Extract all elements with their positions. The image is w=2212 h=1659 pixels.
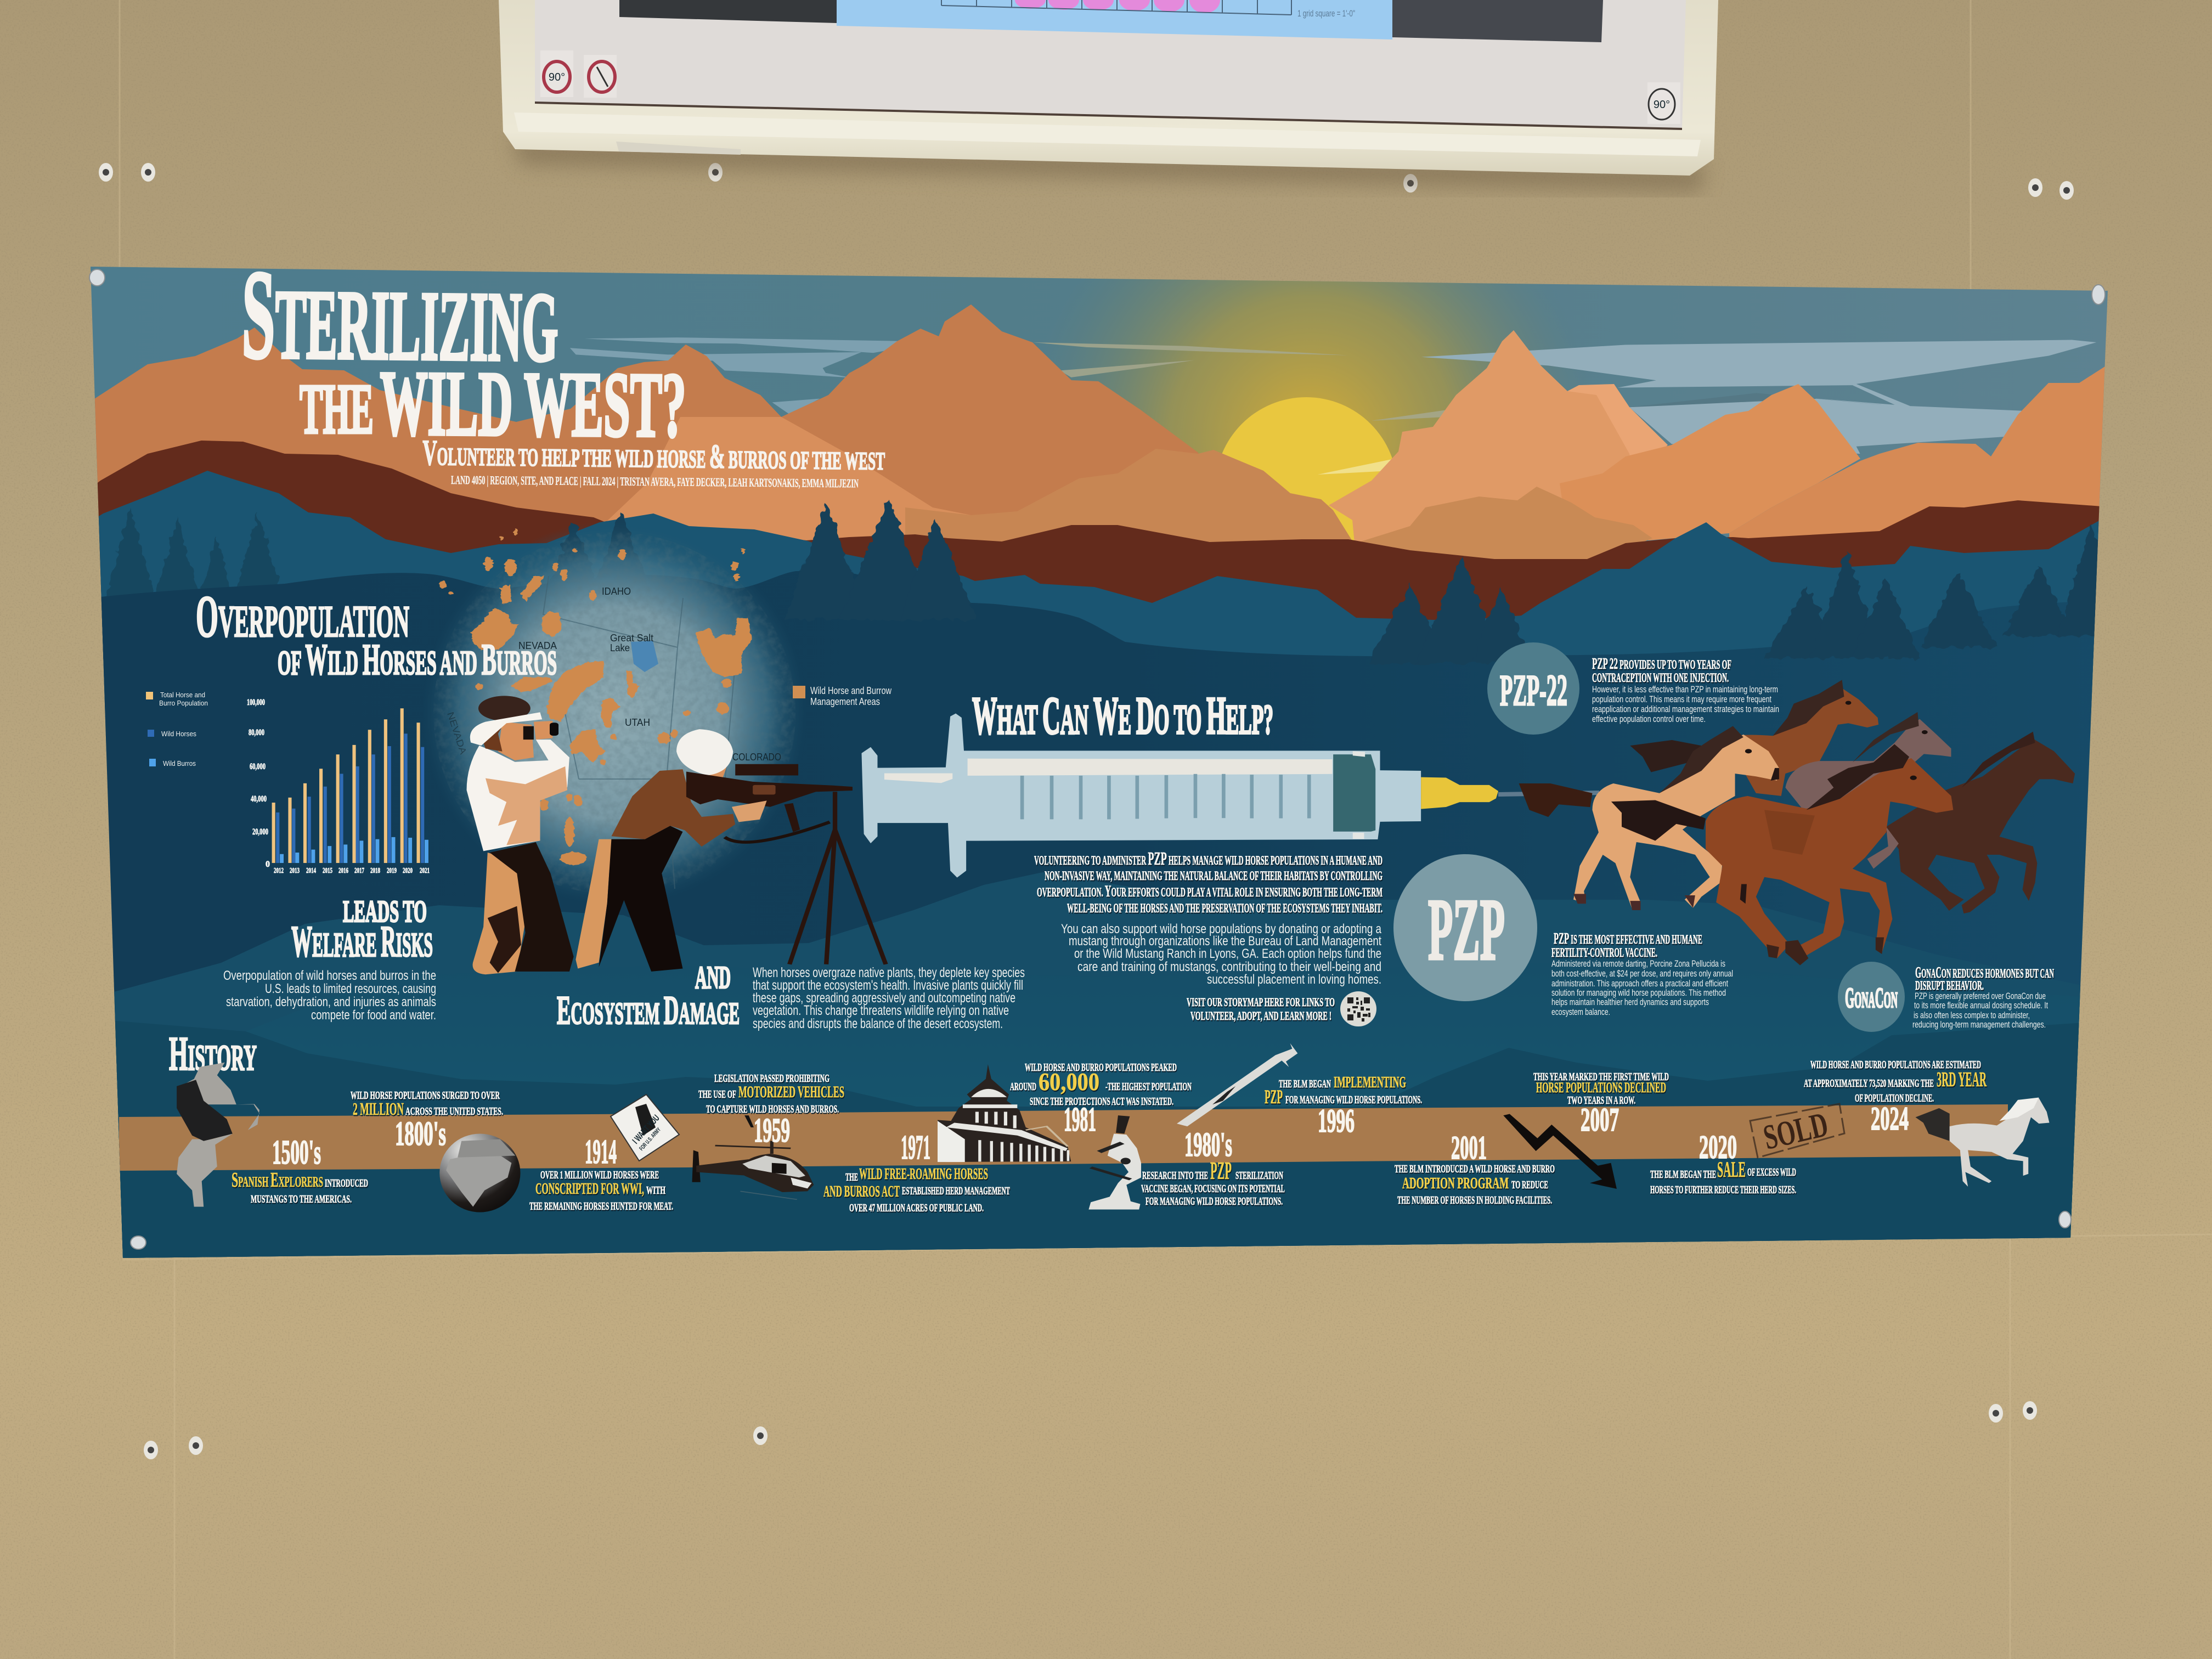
x axis years: 2015 xyxy=(323,867,332,875)
timeline: 1959: TO CAPTURE WILD HORSES AND BURROS. xyxy=(706,1103,839,1115)
map spotlight xyxy=(422,521,815,911)
poster: 3RD YEAR xyxy=(1937,1068,1987,1091)
timeline: 2001: THE NUMBER OF HORSES IN HOLDING FACILITIES. xyxy=(1397,1194,1552,1206)
x axis years: 2012 xyxy=(274,867,284,875)
icon: I want you poster: FOR U.S. ARMY xyxy=(638,1126,662,1152)
PZP text: Administered via remote darting, Porcine Zona Pellucida is xyxy=(1551,958,1725,969)
chart legend: Total Horse and xyxy=(160,691,205,699)
figure: man with binoculars xyxy=(467,696,574,974)
timeline: 1996 xyxy=(1265,1074,1422,1139)
timeline: 1996: PZP xyxy=(1265,1086,1283,1108)
volunteering text: NON-INVASIVE WAY, MAINTAINING THE NATURAL BALANCE OF THEIR HABITATS BY CONTROLLING xyxy=(1045,869,1383,883)
storymap call to action: VOLUNTEER, ADOPT, AND LEARN MORE ! xyxy=(1190,1009,1331,1023)
icon: declining arrow xyxy=(1503,1114,1617,1189)
horse: light tan xyxy=(1519,726,1779,910)
callout: PZP circle: PZP xyxy=(1428,881,1505,978)
timeline: 1981: 60,000 xyxy=(1039,1068,1099,1096)
y axis labels: 0 xyxy=(266,860,270,869)
timeline: 1971: ESTABLISHED HERD MANAGEMENT xyxy=(902,1185,1010,1197)
timeline: 1800s: 2 MILLION xyxy=(353,1099,404,1119)
map labels: Great Salt xyxy=(610,633,653,644)
timeline: 1500s: MUSTANGS TO THE AMERICAS. xyxy=(251,1193,352,1205)
timeline: 2020: SALE xyxy=(1717,1157,1746,1182)
sun glow xyxy=(1004,219,1618,592)
timeline: 1914: OVER 1 MILLION WILD HORSES WERE xyxy=(540,1169,659,1181)
center mountain back xyxy=(1481,330,1668,483)
dark pine trees xyxy=(535,498,2118,664)
map legend: Wild Horse and Burrow xyxy=(810,685,892,696)
ecosystem damage text xyxy=(753,965,1025,1031)
timeline: 1959: THE USE OF xyxy=(698,1088,736,1101)
timeline: 1959 xyxy=(698,1073,844,1115)
PZP-22 text: reapplication or additional management strategies to maintain xyxy=(1592,704,1779,714)
PZP text: PZP IS THE MOST EFFECTIVE AND HUMANE xyxy=(1554,930,1702,947)
timeline: 1971 xyxy=(823,1129,1010,1214)
blue ridge xyxy=(91,471,2118,713)
PZP text xyxy=(1551,930,1733,1017)
timeline: 2020: 2020 xyxy=(1699,1129,1737,1165)
timeline: 2001: 2001 xyxy=(1451,1130,1487,1166)
x axis years: 2014 xyxy=(306,867,316,875)
scattered management areas xyxy=(439,528,745,602)
timeline: 1996: 1996 xyxy=(1318,1103,1355,1139)
icon: capitol building xyxy=(938,1064,1071,1162)
chart legend: Burro Population xyxy=(159,699,208,707)
icon: sold stamp: SOLD xyxy=(1760,1104,1832,1157)
x axis years: 2017 xyxy=(354,867,364,875)
heading: what can we do to help: WHAT CAN WE DO TO HELP? xyxy=(972,686,1273,746)
dark foreground xyxy=(91,571,2118,1262)
timeline: 2007 xyxy=(1533,1071,1669,1138)
timeline: 2001: TO REDUCE xyxy=(1511,1179,1548,1191)
timeline: 1981: WILD HORSE AND BURRO POPULATIONS PEAKED xyxy=(1025,1062,1177,1074)
bars xyxy=(272,708,428,863)
icon: rearing horse with rider xyxy=(177,1063,259,1207)
needle xyxy=(1498,793,1599,794)
timeline: 1981: 1981 xyxy=(1064,1101,1096,1138)
y axis labels: 40,000 xyxy=(251,794,267,804)
timeline: 2001 xyxy=(1395,1130,1555,1206)
timeline: 2024: OF POPULATION DECLINE. xyxy=(1855,1092,1934,1104)
timeline: 1980s: VACCINE BEGAN, FOCUSING ON ITS POTENTIAL xyxy=(1141,1183,1285,1195)
year 1959: 1959 xyxy=(754,1112,790,1149)
y axis labels: 100,000 xyxy=(247,698,265,707)
heading: leads to welfare risks: WELFARE RISKS xyxy=(291,918,433,966)
icon: microscope xyxy=(1088,1115,1141,1210)
map labels: COLORADO xyxy=(732,752,781,763)
horse: front brown xyxy=(1706,744,1953,965)
center mountain xyxy=(1329,330,1646,549)
ecosystem damage text: species and disrupts the balance of the desert ecosystem. xyxy=(753,1016,1003,1031)
heading: overpopulation: OVERPOPULATION xyxy=(196,584,409,650)
history heading: HISTORY xyxy=(169,1028,257,1081)
PZP text: ecosystem balance. xyxy=(1551,1007,1610,1017)
callout: PZP circle xyxy=(1393,854,1537,1001)
icon: helicopter xyxy=(692,1115,814,1199)
below band fill xyxy=(110,1147,2118,1262)
PZP text: both cost-effective, at $24 per dose, and requires only annual xyxy=(1551,968,1733,979)
clouds left xyxy=(570,337,903,415)
timeline: 1500s: INTRODUCED xyxy=(325,1177,368,1189)
title: THE xyxy=(300,370,374,449)
sun xyxy=(1215,397,1397,579)
subtitle: VOLUNTEER TO HELP THE WILD HORSE & BURROS OF THE WEST xyxy=(422,433,885,478)
PZP-22 text: effective population control over time. xyxy=(1592,714,1706,724)
ecosystem damage text: these gaps, spreading aggressively and outcompeting native xyxy=(753,990,1015,1006)
welfare risks text: starvation, dehydration, and injuries as animals xyxy=(226,995,436,1009)
map labels: IDAHO xyxy=(602,586,631,597)
GonaCon text xyxy=(1912,964,2054,1030)
icon: QR code xyxy=(1340,991,1376,1026)
screen: dark right panel xyxy=(1392,0,1603,42)
callout: PZP-22 circle: PZP-22 xyxy=(1500,667,1567,715)
x axis years: 2016 xyxy=(338,867,348,875)
ecosystem damage text: vegetation. This change threatens wildlife relying on native xyxy=(753,1003,1009,1018)
lake xyxy=(631,641,658,672)
volunteering text: VOLUNTEERING TO ADMINISTER PZP HELPS MANAGE WILD HORSE POPULATIONS IN A HUMANE AND xyxy=(1034,849,1383,869)
heading: leads to welfare risks xyxy=(291,895,433,966)
welfare risks text: U.S. leads to limited resources, causing xyxy=(265,981,436,996)
timeline: 2024: 2024 xyxy=(1871,1101,1909,1137)
storymap call to action: VISIT OUR STORYMAP HERE FOR LINKS TO xyxy=(1187,995,1335,1009)
timeline: 1996: FOR MANAGING WILD HORSE POPULATIONS. xyxy=(1285,1094,1422,1106)
GonaCon text: reducing long-term management challenges. xyxy=(1912,1019,2046,1030)
timeline: 1980s xyxy=(1141,1126,1285,1207)
timeline: 1971: OVER 47 MILLION ACRES OF PUBLIC LAND. xyxy=(849,1202,984,1214)
wall screws xyxy=(99,163,2074,1459)
ecosystem damage text: When horses overgraze native plants, they deplete key species xyxy=(753,965,1025,980)
timeline: 2020 xyxy=(1650,1129,1796,1196)
timeline: 1914: THE REMAINING HORSES HUNTED FOR MEAT. xyxy=(529,1200,673,1212)
map labels: NEVADA xyxy=(445,710,469,756)
center lower mountain xyxy=(1356,487,1652,565)
y axis labels xyxy=(247,698,270,869)
x axis years: 2019 xyxy=(387,867,397,875)
timeline: 1800s: WILD HORSE POPULATIONS SURGED TO OVER xyxy=(351,1090,500,1102)
timeline: 1980s: RESEARCH INTO THE xyxy=(1142,1170,1208,1182)
far right mountains xyxy=(1729,357,2118,560)
screen: blue grid chart: 1 grid square = 1'-0" xyxy=(1297,8,1355,19)
timeline: 1981: -THE HIGHEST POPULATION xyxy=(1105,1081,1192,1093)
heading: and ecosystem damage: ECOSYSTEM DAMAGE xyxy=(557,988,740,1033)
timeline: 1971: WILD FREE-ROAMING HORSES xyxy=(859,1166,988,1183)
support text: or the Wild Mustang Ranch in Lyons, GA. Each option helps fund the xyxy=(1074,946,1381,961)
timeline: 1914: 1914 xyxy=(585,1133,617,1171)
volunteering text: OVERPOPULATION. YOUR EFFORTS COULD PLAY A VITAL ROLE IN ENSURING BOTH THE LONG-TERM xyxy=(1037,882,1383,900)
icon: I want you poster xyxy=(611,1094,679,1161)
credits line: LAND 4050 | REGION, SITE, AND PLACE | FALL 2024 | TRISTAN AVERA, FAYE DECKER, LEAH KARTSONAKIS, EMMA MILJEZIN xyxy=(451,473,859,490)
title line 1: STERILIZING xyxy=(241,244,559,388)
PZP-22 text: However, it is less effective than PZP in maintaining long-term xyxy=(1592,684,1778,695)
GonaCon text: PZP is generally preferred over GonaCon due xyxy=(1915,991,2046,1001)
timeline: 1996: IMPLEMENTING xyxy=(1334,1074,1406,1091)
poster xyxy=(82,219,2123,1262)
welfare risks text xyxy=(223,968,436,1023)
x axis years: 2018 xyxy=(370,867,380,875)
timeline: 1981: SINCE THE PROTECTIONS ACT WAS INSTATED. xyxy=(1030,1096,1173,1108)
timeline: 1981 xyxy=(1010,1062,1192,1138)
figure: woman with rifle xyxy=(575,729,886,972)
timeline: 1500s xyxy=(232,1134,368,1205)
icon: no tilt sticker xyxy=(584,55,617,98)
timeline: 1980s: 1980's xyxy=(1184,1126,1232,1164)
map legend: Management Areas xyxy=(810,696,880,707)
timeline: 1800s: 1800's xyxy=(395,1115,446,1153)
icon: rotate 90 sticker: 90° xyxy=(1654,99,1670,111)
PZP-22 text: CONTRACEPTION WITH ONE INJECTION. xyxy=(1592,671,1729,685)
right center mountain xyxy=(1560,384,1860,540)
welfare risks text: Overpopulation of wild horses and burros in the xyxy=(223,968,436,983)
timeline: 1980s: FOR MANAGING WILD HORSE POPULATIONS. xyxy=(1146,1195,1283,1207)
timeline: 1971: AND BURROS ACT xyxy=(823,1183,900,1200)
wild horse management areas (map blobs) xyxy=(439,576,752,865)
heading: overpopulation: OF WILD HORSES AND BURROS xyxy=(278,636,557,684)
map labels: UTAH xyxy=(625,717,650,728)
title line 2 large: WILD WEST? xyxy=(380,352,686,456)
icon: no rotate sticker xyxy=(540,50,573,97)
timeline: 1800s xyxy=(351,1090,503,1153)
timeline: 2007: 2007 xyxy=(1581,1102,1619,1138)
timeline: 2024 xyxy=(1804,1059,1987,1137)
timeline: 2007: HORSE POPULATIONS DECLINED xyxy=(1536,1080,1666,1096)
x axis years xyxy=(274,867,430,875)
map labels xyxy=(445,586,781,763)
timeline: 1500s: 1500's xyxy=(272,1134,321,1171)
timeline: 1980s: PZP xyxy=(1210,1156,1232,1184)
icon: syringe xyxy=(861,714,1498,878)
timeline: 1914: CONSCRIPTED FOR WWI, xyxy=(535,1181,644,1198)
map labels: Lake xyxy=(610,642,630,653)
icon: globe xyxy=(439,1133,521,1212)
horse: dark right xyxy=(1867,732,2075,913)
support text: You can also support wild horse populations by donating or adopting a xyxy=(1061,922,1382,936)
timeline: 2001: THE BLM INTRODUCED A WILD HORSE AND BURRO xyxy=(1395,1163,1555,1175)
screen: dark left panel xyxy=(619,0,837,23)
rifle on tripod xyxy=(686,764,886,964)
PZP-22 text xyxy=(1592,656,1779,724)
volunteering text xyxy=(1034,849,1383,915)
chart legend xyxy=(146,691,208,768)
map labels: NEVADA xyxy=(518,640,557,651)
x axis years: 2013 xyxy=(290,867,300,875)
icon: sold stamp xyxy=(1750,1104,1844,1158)
welfare risks text: compete for food and water. xyxy=(311,1008,436,1023)
PZP text: helps maintain healthier herd dynamics and supports xyxy=(1551,997,1709,1007)
GonaCon text: to its more flexible annual dosing schedule. It xyxy=(1914,1000,2048,1011)
timeline: 1914: WITH xyxy=(646,1184,665,1197)
support text: successful placement in loving homes. xyxy=(1207,972,1381,987)
trees left (blue ridge) xyxy=(91,505,302,658)
timeline: 1800s: ACROSS THE UNITED STATES. xyxy=(405,1105,503,1118)
timeline: 2007: THIS YEAR MARKED THE FIRST TIME WILD xyxy=(1533,1071,1669,1083)
timeline: 2020: HORSES TO FURTHER REDUCE THEIR HERD SIZES. xyxy=(1650,1184,1796,1196)
PZP text: administration. This approach offers a practical and efficient xyxy=(1551,978,1728,989)
timeline: 2024: AT APPROXIMATELY 73,520 MARKING THE xyxy=(1804,1077,1934,1090)
support text xyxy=(1061,922,1382,987)
icon: no rotate sticker: 90° xyxy=(549,71,565,83)
storymap call to action xyxy=(1187,995,1335,1023)
y axis labels: 80,000 xyxy=(249,728,264,737)
GonaCon text: is also often less complex to administer, xyxy=(1914,1010,2030,1020)
y axis labels: 20,000 xyxy=(252,827,268,837)
ecosystem damage text: that support the ecosystem's health. Invasive plants quickly fill xyxy=(753,978,1023,993)
bar chart: horse and burro population xyxy=(247,698,430,875)
timeline: 1971: 1971 xyxy=(901,1129,930,1166)
PZP text: solution for managing wild horse populations. This method xyxy=(1551,988,1726,998)
timeline: 1981: AROUND xyxy=(1010,1081,1036,1093)
timeline: 2007: TWO YEARS IN A ROW. xyxy=(1567,1094,1635,1107)
chart legend: Wild Horses xyxy=(161,730,196,738)
timeline: 2020: OF EXCESS WILD xyxy=(1747,1166,1796,1178)
timeline: 1971: THE xyxy=(845,1171,858,1183)
callout: GonaCon circle: GONACON xyxy=(1845,983,1898,1014)
icon: I want you poster: I WANT YOU xyxy=(630,1113,662,1146)
horse: brown back xyxy=(1630,680,1878,796)
lighter lower left slope xyxy=(606,417,971,549)
timeline: 2020: THE BLM BEGAN THE xyxy=(1650,1169,1716,1181)
timeline: 2024: WILD HORSE AND BURRO POPULATIONS ARE ESTIMATED xyxy=(1810,1059,1981,1071)
chart legend: Wild Burros xyxy=(163,759,196,768)
icon: small syringe xyxy=(1177,1043,1297,1126)
timeline: 1980s: STERILIZATION xyxy=(1235,1170,1283,1182)
timeline: 1959: MOTORIZED VEHICLES xyxy=(738,1083,844,1101)
GonaCon text: GONACON REDUCES HORMONES BUT CAN xyxy=(1915,964,2054,981)
callout: PZP-22 circle xyxy=(1487,642,1579,735)
PZP text: FERTILITY-CONTROL VACCINE. xyxy=(1551,946,1657,960)
heading: and ecosystem damage: AND xyxy=(695,960,731,995)
heading: and ecosystem damage xyxy=(557,960,740,1033)
display case frame at top of wall xyxy=(499,0,1718,192)
PZP-22 text: PZP 22 PROVIDES UP TO TWO YEARS OF xyxy=(1592,656,1731,673)
GonaCon text: DISRUPT BEHAVIOR. xyxy=(1915,979,1984,992)
x axis years: 2020 xyxy=(403,867,413,875)
timeline band xyxy=(119,1104,2008,1171)
rust ridge xyxy=(91,441,2118,658)
heading: overpopulation xyxy=(196,584,557,684)
screen: blue grid chart xyxy=(837,0,1392,40)
map legend xyxy=(793,685,892,707)
PZP-22 text: population control. This means it may require more frequent xyxy=(1592,694,1771,704)
support text: mustang through organizations like the Bureau of Land Management xyxy=(1069,934,1381,949)
x axis years: 2021 xyxy=(420,867,430,875)
far left mountains xyxy=(91,304,1234,565)
corner pins xyxy=(89,269,2105,1249)
sky xyxy=(82,258,2123,752)
timeline: 1914 xyxy=(529,1133,673,1212)
mid-left mountain xyxy=(905,449,1361,554)
horses illustration xyxy=(1519,680,2075,965)
horse: gray xyxy=(1785,712,1951,810)
title xyxy=(241,244,885,490)
lower hills xyxy=(110,872,2118,1262)
timeline: 2001: ADOPTION PROGRAM xyxy=(1402,1175,1509,1192)
clouds right xyxy=(1032,340,2096,475)
timeline: 1996: THE BLM BEGAN xyxy=(1279,1078,1331,1090)
heading: leads to welfare risks: LEADS TO xyxy=(343,895,427,929)
icon: white running horse xyxy=(1915,1098,2050,1187)
icon: rotate 90 sticker xyxy=(1647,82,1680,124)
timeline: 1959: LEGISLATION PASSED PROHIBITING xyxy=(714,1073,830,1085)
y axis labels: 60,000 xyxy=(250,762,266,771)
support text: care and training of mustangs, contributing to their well-being and xyxy=(1077,960,1381,974)
callout: GonaCon circle xyxy=(1838,962,1905,1032)
timeline: 1500s: SPANISH EXPLORERS xyxy=(232,1169,323,1192)
volunteering text: WELL-BEING OF THE HORSES AND THE PRESERVATION OF THE ECOSYSTEMS THEY INHABIT. xyxy=(1067,901,1383,915)
